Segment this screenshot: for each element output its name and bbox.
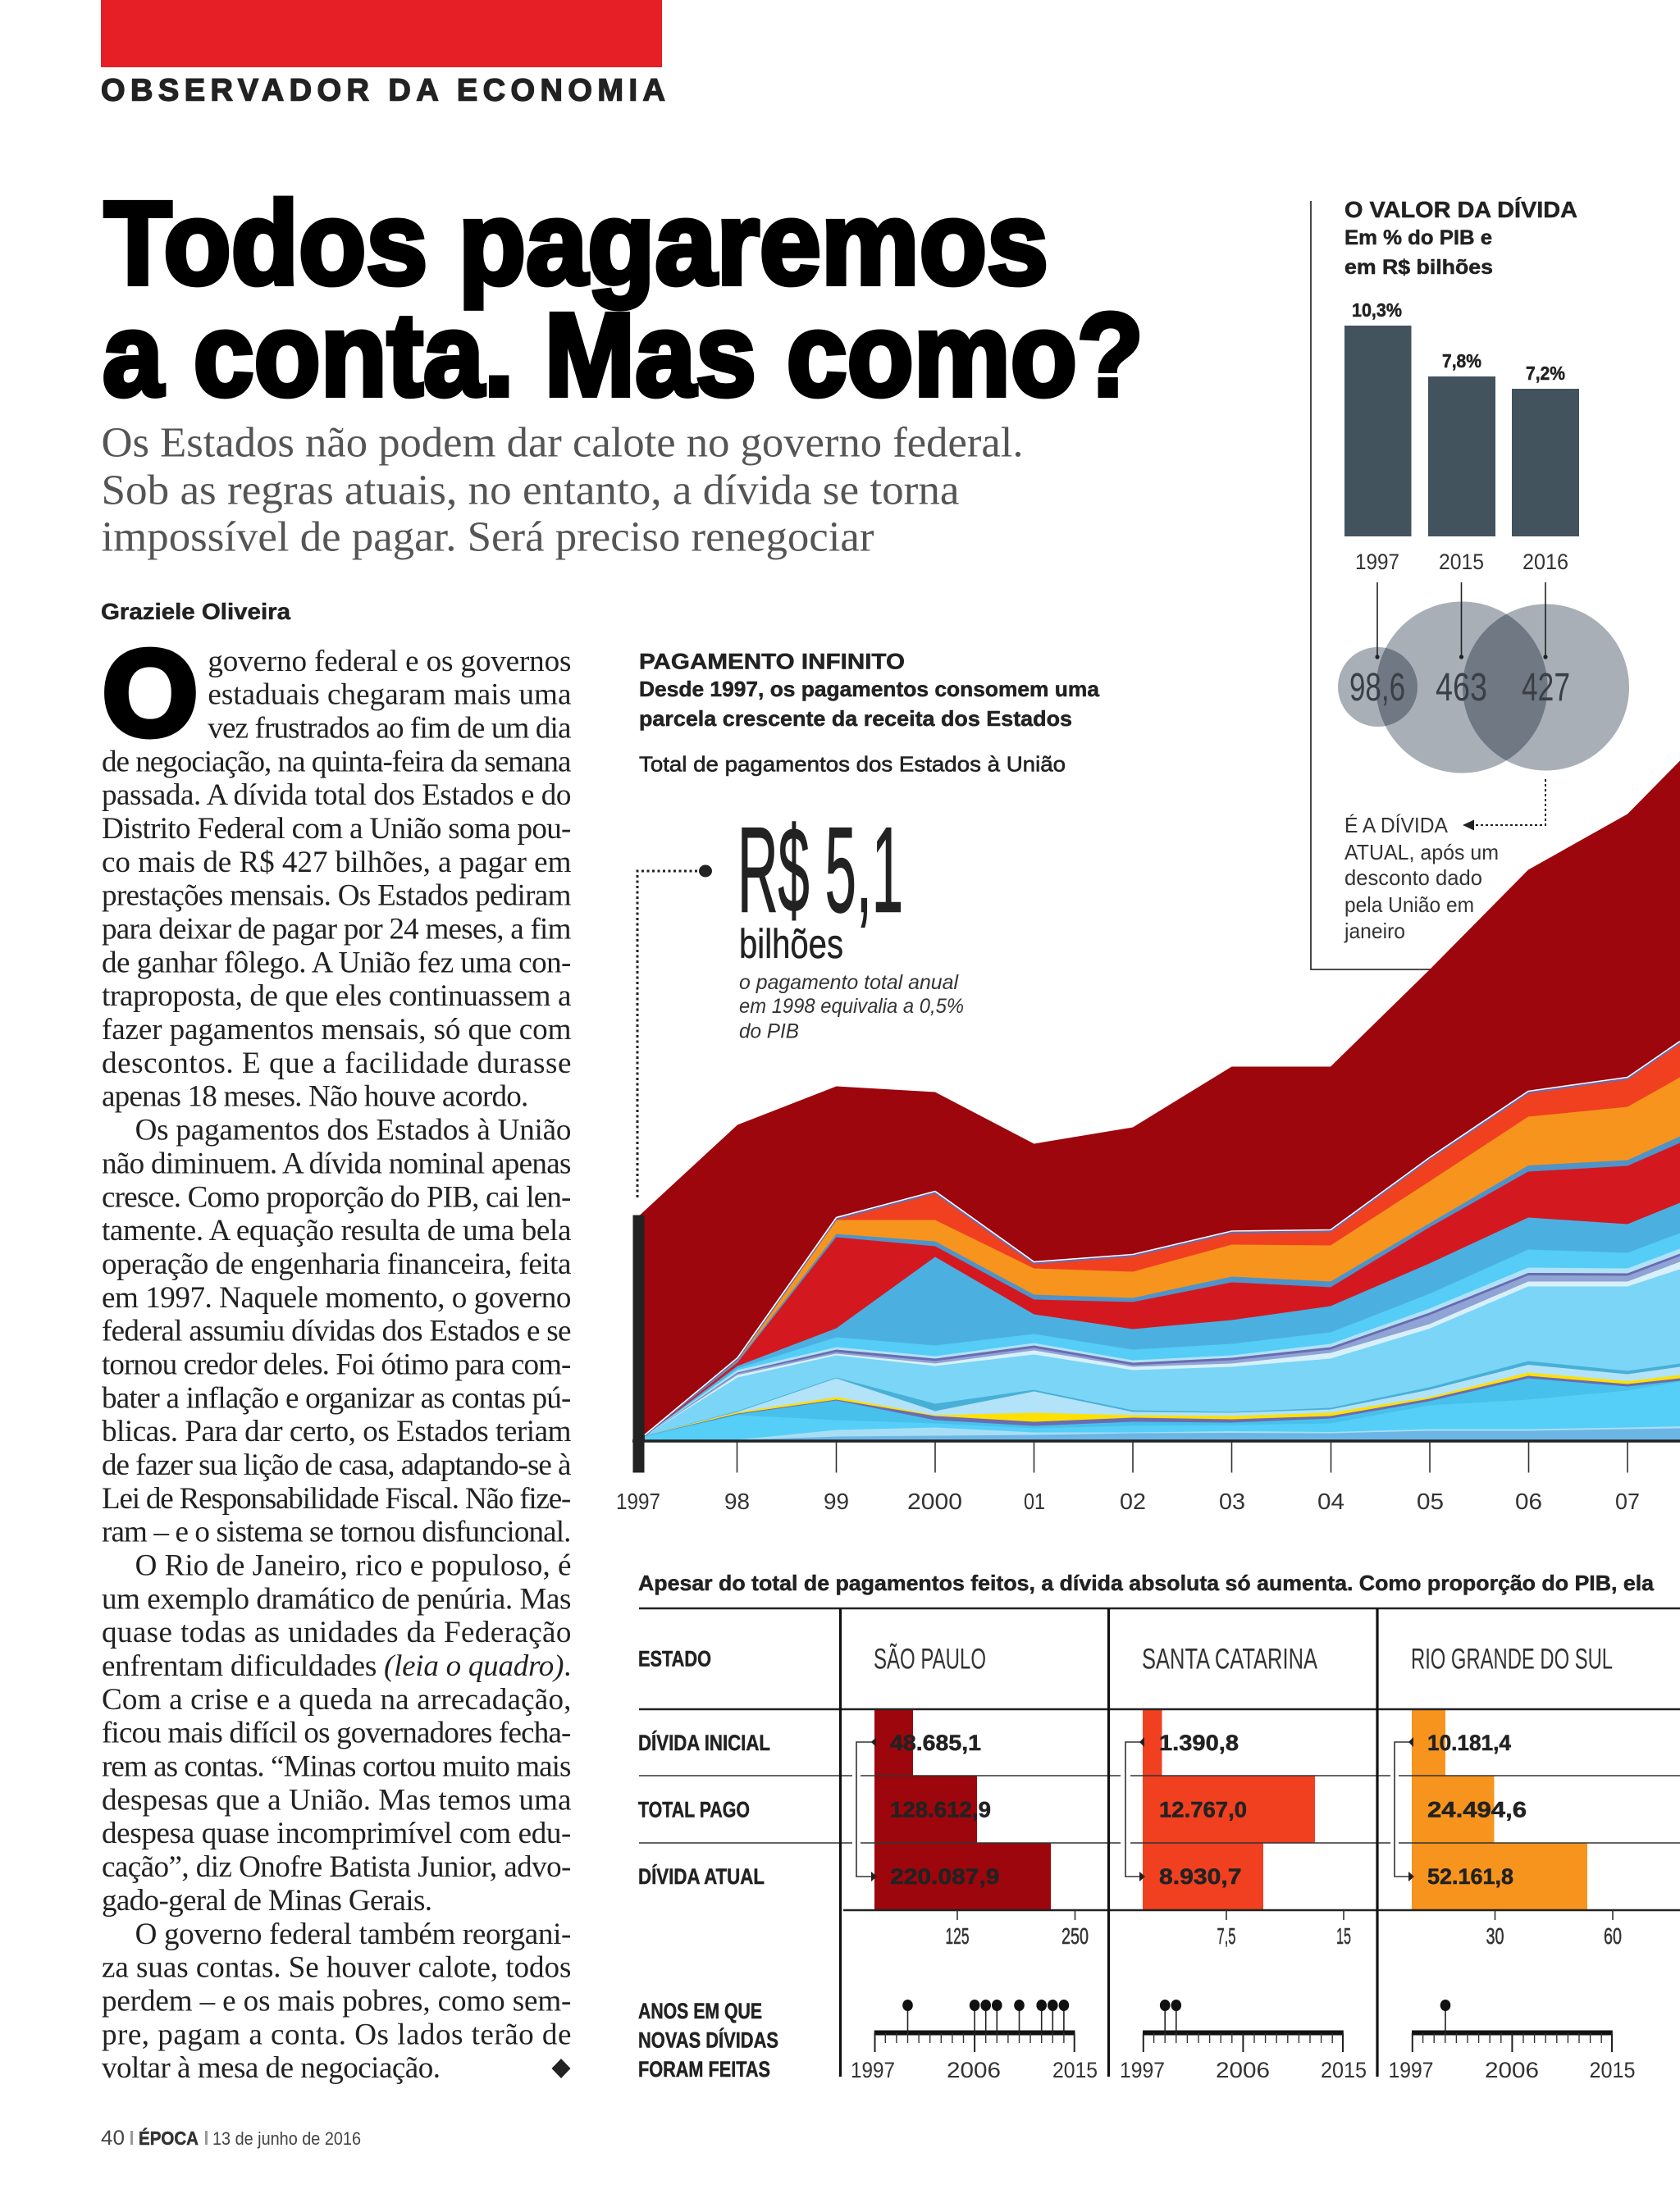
x axis year labels: 1997 bbox=[616, 1489, 660, 1514]
values: 52.161,8 bbox=[1427, 1864, 1513, 1889]
chart heading: PAGAMENTO INFINITO bbox=[639, 650, 905, 674]
title: Todos pagaremos bbox=[104, 177, 1048, 309]
article text: cresce. Como proporção do PIB, cai len- bbox=[102, 1180, 571, 1214]
article text: em 1997. Naquele momento, o governo bbox=[102, 1281, 571, 1315]
chart heading bbox=[639, 650, 1100, 776]
article text: de ganhar fôlego. A União fez uma con- bbox=[102, 946, 571, 979]
timeline: Santa Catarina bbox=[1120, 2000, 1367, 2082]
title: a conta. Mas como? bbox=[103, 289, 1144, 421]
chart heading: parcela crescente da receita dos Estados bbox=[639, 706, 1072, 731]
panel border bbox=[1311, 201, 1460, 969]
stacked area chart: payments by state bbox=[632, 761, 1680, 1473]
x axis year labels: 06 bbox=[1515, 1489, 1542, 1514]
article text: Os pagamentos dos Estados à União bbox=[135, 1114, 571, 1147]
note: current debt bbox=[1344, 813, 1499, 943]
callout leader: dotted line bbox=[637, 864, 712, 1197]
callout: R$ 5,1 bilhões: R$ 5,1 bbox=[737, 802, 903, 938]
bars: Rio Grande do Sul bbox=[1412, 1709, 1587, 1910]
article text: pre, pagam a conta. Os lados terão de bbox=[102, 2018, 571, 2051]
row labels: ESTADO bbox=[638, 1647, 711, 1672]
byline: Graziele Oliveira bbox=[101, 599, 290, 624]
article text: co mais de R$ 427 bilhões, a pagar em bbox=[102, 846, 572, 879]
timeline: Santa Catarina: 1997 bbox=[1120, 2058, 1165, 2082]
values: 12.767,0 bbox=[1159, 1798, 1247, 1822]
chart heading: Desde 1997, os pagamentos consomem uma bbox=[639, 677, 1100, 701]
panel heading: O VALOR DA DÍVIDA bbox=[1344, 197, 1577, 222]
layer: sky blue bbox=[645, 1378, 1680, 1442]
timeline: São Paulo: 2015 bbox=[1052, 2058, 1098, 2082]
bar chart: debt as % of GDP: 7,2% bbox=[1526, 363, 1565, 384]
values: 24.494,6 bbox=[1427, 1798, 1527, 1822]
article text: um exemplo dramático de penúria. Mas bbox=[102, 1582, 571, 1616]
timeline label: FORAM FEITAS bbox=[638, 2057, 770, 2082]
section label: OBSERVADOR DA ECONOMIA bbox=[101, 74, 665, 108]
x axis with ticks bbox=[632, 1439, 1680, 1443]
arrow: dotted leader to note bbox=[1463, 779, 1545, 830]
timeline label: ANOS EM QUE bbox=[638, 1999, 762, 2023]
article text: ram – e o sistema se tornou disfuncional. bbox=[102, 1516, 571, 1549]
scale labels: 60 bbox=[1604, 1923, 1622, 1949]
article text: passada. A dívida total dos Estados e do bbox=[102, 778, 571, 812]
layer: pale blue bbox=[645, 1365, 1680, 1442]
layer: orange bbox=[645, 1078, 1680, 1442]
layer: purple bbox=[645, 1376, 1680, 1442]
layer: red bbox=[645, 1143, 1680, 1442]
timeline: Santa Catarina: 2006 bbox=[1216, 2058, 1270, 2082]
x axis year labels: 98 bbox=[724, 1489, 750, 1514]
bar chart: debt as % of GDP: 2016 bbox=[1522, 550, 1568, 574]
bar chart: debt as % of GDP: 10,3% bbox=[1352, 299, 1402, 321]
layer: cyan bbox=[645, 1234, 1680, 1442]
layer: bottom blue bbox=[645, 1429, 1680, 1442]
note: current debt: É A DÍVIDA bbox=[1344, 813, 1449, 837]
scale labels: 30 bbox=[1486, 1923, 1504, 1949]
panel heading: Em % do PIB e bbox=[1344, 226, 1492, 249]
article text: O governo federal também reorgani- bbox=[135, 1918, 571, 1951]
values: 1.390,8 bbox=[1159, 1731, 1239, 1755]
subtitle bbox=[102, 420, 1024, 561]
chart axis ticks bbox=[737, 1442, 1628, 1473]
article text: descontos. E que a facilidade durasse bbox=[102, 1047, 571, 1080]
x axis year labels: 04 bbox=[1317, 1489, 1344, 1514]
article text: despesas que a União. Mas temos uma bbox=[102, 1783, 571, 1817]
footer folio: 13 de junho de 2016 bbox=[212, 2128, 361, 2149]
article text: za suas contas. Se houver calote, todos bbox=[102, 1951, 571, 1985]
layer: light blue bbox=[645, 1270, 1680, 1442]
article text: tamente. A equação resulta de uma bela bbox=[102, 1214, 571, 1247]
article text bbox=[102, 645, 572, 2085]
callout: R$ 5,1 bilhões bbox=[737, 802, 964, 1043]
article text: não diminuem. A dívida nominal apenas bbox=[102, 1147, 571, 1180]
values: 10.181,4 bbox=[1427, 1731, 1511, 1755]
edge line: white highlight bbox=[645, 1042, 1680, 1435]
article text: apenas 18 meses. Não houve acordo. bbox=[102, 1080, 528, 1114]
timeline: São Paulo bbox=[851, 2000, 1098, 2082]
footer folio: ÉPOCA bbox=[139, 2127, 199, 2149]
bar chart: debt as % of GDP: 1997 bbox=[1355, 550, 1399, 574]
article text: tornou credor deles. Foi ótimo para com- bbox=[102, 1348, 571, 1381]
article text: Distrito Federal com a União soma pou- bbox=[102, 812, 571, 846]
scale labels: 250 bbox=[1061, 1923, 1089, 1949]
title bbox=[103, 177, 1144, 421]
article text: voltar à mesa de negociação. bbox=[102, 2051, 441, 2085]
article text: fazer pagamentos mensais, só que com bbox=[102, 1013, 572, 1047]
chart start bar bbox=[633, 1215, 645, 1473]
row labels: DÍVIDA INICIAL bbox=[638, 1730, 770, 1755]
values: 8.930,7 bbox=[1159, 1864, 1242, 1889]
row labels bbox=[638, 1647, 770, 1889]
layer: pale cap bbox=[645, 1248, 1680, 1442]
values bbox=[890, 1731, 1527, 1889]
timeline: Rio Grande do Sul: 2006 bbox=[1485, 2058, 1539, 2082]
footer folio: 40 bbox=[101, 2127, 125, 2150]
connectors: initial to current debt bbox=[856, 1742, 1412, 1877]
timeline: Rio Grande do Sul: 2015 bbox=[1590, 2058, 1636, 2082]
article text: enfrentam dificuldades (leia o quadro). bbox=[102, 1649, 571, 1683]
article text: perdem – e os mais pobres, como sem- bbox=[102, 1984, 571, 2018]
article text: governo federal e os governos bbox=[208, 645, 571, 678]
timeline label: NOVAS DÍVIDAS bbox=[638, 2027, 778, 2052]
article text: gado-geral de Minas Gerais. bbox=[102, 1884, 432, 1918]
article text: para deixar de pagar por 24 meses, a fim bbox=[102, 913, 572, 946]
layer: white blue bbox=[645, 1261, 1680, 1442]
layer: dark red bbox=[640, 761, 1680, 1442]
article text: despesa quase incomprimível com edu- bbox=[102, 1817, 571, 1850]
section flag: red block bbox=[101, 0, 662, 67]
timeline: Rio Grande do Sul bbox=[1388, 2000, 1636, 2082]
layer: pale strip bbox=[645, 1426, 1680, 1442]
timeline: Rio Grande do Sul: 1997 bbox=[1388, 2058, 1434, 2082]
note: current debt: janeiro bbox=[1344, 919, 1405, 943]
timeline: Santa Catarina: 2015 bbox=[1321, 2058, 1367, 2082]
article text: Com a crise e a queda na arrecadação, bbox=[102, 1683, 571, 1717]
x axis year labels: 02 bbox=[1120, 1489, 1146, 1514]
article text: operação de engenharia financeira, feita bbox=[102, 1247, 571, 1281]
subtitle: Os Estados não podem dar calote no governo federal. bbox=[102, 420, 1024, 466]
scale labels bbox=[945, 1923, 1622, 1949]
article text: federal assumiu dívidas dos Estados e se bbox=[102, 1315, 571, 1348]
subtitle: Sob as regras atuais, no entanto, a dívida se torna bbox=[102, 467, 960, 513]
scale labels: 125 bbox=[945, 1923, 970, 1949]
article text: prestações mensais. Os Estados pediram bbox=[102, 879, 572, 913]
x axis year labels bbox=[616, 1489, 1640, 1514]
values: 48.685,1 bbox=[890, 1731, 981, 1755]
note: current debt: pela União em bbox=[1344, 892, 1474, 917]
article text: rem as contas. “Minas cortou muito mais bbox=[102, 1750, 571, 1784]
layer: dark purple bbox=[645, 1253, 1680, 1442]
bubble chart: debt in R$ billions: 463 bbox=[1436, 666, 1487, 709]
article text: Lei de Responsabilidade Fiscal. Não fize- bbox=[102, 1482, 571, 1516]
article text: O Rio de Janeiro, rico e populoso, é bbox=[135, 1549, 571, 1583]
article text: vez frustrados ao fim de um dia bbox=[208, 712, 571, 745]
x axis year labels: 01 bbox=[1024, 1489, 1045, 1514]
layer: yellow bbox=[645, 1373, 1680, 1442]
bubble chart: debt in R$ billions: 427 bbox=[1522, 666, 1570, 709]
bar chart: debt as % of GDP: 7,8% bbox=[1442, 350, 1481, 372]
callout: R$ 5,1 bilhões: em 1998 equivalia a 0,5% bbox=[739, 995, 964, 1018]
layer: mid blue bbox=[645, 1202, 1680, 1442]
x axis year labels: 05 bbox=[1417, 1489, 1444, 1514]
timeline label bbox=[638, 1999, 778, 2082]
article text: ficou mais difícil os governadores fecha- bbox=[102, 1717, 571, 1750]
panel: o valor da divida bbox=[1311, 197, 1629, 969]
state names: SÃO PAULO bbox=[874, 1644, 986, 1675]
article text: blicas. Para dar certo, os Estados teriam bbox=[102, 1415, 572, 1448]
timeline: São Paulo: 1997 bbox=[851, 2058, 895, 2082]
state names: SANTA CATARINA bbox=[1142, 1644, 1317, 1675]
article text: cação”, diz Onofre Batista Junior, advo- bbox=[102, 1850, 571, 1884]
timeline: São Paulo: 2006 bbox=[947, 2058, 1001, 2082]
end mark: diamond bbox=[551, 2059, 571, 2078]
article text: estaduais chegaram mais uma bbox=[208, 678, 571, 712]
panel heading bbox=[1344, 197, 1577, 279]
edge line: top of stacked states bbox=[645, 1043, 1680, 1435]
bar chart: debt as % of GDP: 2015 bbox=[1439, 550, 1484, 574]
layer: steel blue bbox=[645, 1137, 1680, 1442]
article text: traproposta, de que eles continuassem a bbox=[102, 979, 571, 1013]
values: 128.612,9 bbox=[890, 1798, 991, 1822]
x axis year labels: 07 bbox=[1615, 1489, 1640, 1514]
subtitle: impossível de pagar. Será preciso renegociar bbox=[102, 513, 874, 561]
note: current debt: desconto dado bbox=[1344, 865, 1482, 890]
note: current debt: ATUAL, após um bbox=[1344, 840, 1499, 864]
table heading: Apesar do total de pagamentos feitos, a dívida absoluta só aumenta. Como proporção do PIB, ela bbox=[638, 1571, 1655, 1595]
row labels: TOTAL PAGO bbox=[638, 1798, 750, 1822]
layer: teal bbox=[645, 1361, 1680, 1442]
scale labels: 7,5 bbox=[1217, 1923, 1235, 1949]
article text: de negociação, na quinta-feira da semana bbox=[102, 745, 571, 778]
x axis year labels: 99 bbox=[824, 1489, 849, 1514]
x axis year labels: 2000 bbox=[907, 1489, 962, 1514]
layer: orange-red bbox=[645, 1042, 1680, 1442]
bubble chart: debt in R$ billions bbox=[1338, 582, 1629, 773]
layer: periwinkle bbox=[645, 1257, 1680, 1442]
row labels: DÍVIDA ATUAL bbox=[638, 1863, 765, 1889]
bubble chart: debt in R$ billions: 98,6 bbox=[1349, 666, 1405, 709]
callout: R$ 5,1 bilhões: do PIB bbox=[739, 1020, 799, 1043]
scale labels: 15 bbox=[1336, 1923, 1351, 1949]
bars: Santa Catarina bbox=[1143, 1709, 1315, 1910]
bar chart: debt as % of GDP bbox=[1344, 299, 1579, 574]
bars: São Paulo bbox=[874, 1709, 1051, 1910]
state names bbox=[874, 1644, 1613, 1675]
panel heading: em R$ bilhões bbox=[1344, 256, 1493, 279]
table: states comparison bbox=[638, 1608, 1680, 2082]
values: 220.087,9 bbox=[890, 1864, 999, 1889]
connector arrowheads bbox=[871, 1737, 1414, 1881]
x axis year labels: 03 bbox=[1219, 1489, 1245, 1514]
callout: R$ 5,1 bilhões: bilhões bbox=[739, 921, 843, 967]
callout: R$ 5,1 bilhões: o pagamento total anual bbox=[739, 971, 959, 994]
article text: quase todas as unidades da Federação bbox=[102, 1616, 571, 1649]
layer: bright cyan bbox=[645, 1381, 1680, 1442]
footer folio bbox=[101, 2127, 361, 2150]
chart heading: Total de pagamentos dos Estados à União bbox=[639, 751, 1066, 776]
article text: bater a inflação e organizar as contas pú- bbox=[102, 1381, 571, 1415]
drop cap: O bbox=[103, 626, 198, 761]
article text: de fazer sua lição de casa, adaptando-se à bbox=[102, 1448, 571, 1482]
